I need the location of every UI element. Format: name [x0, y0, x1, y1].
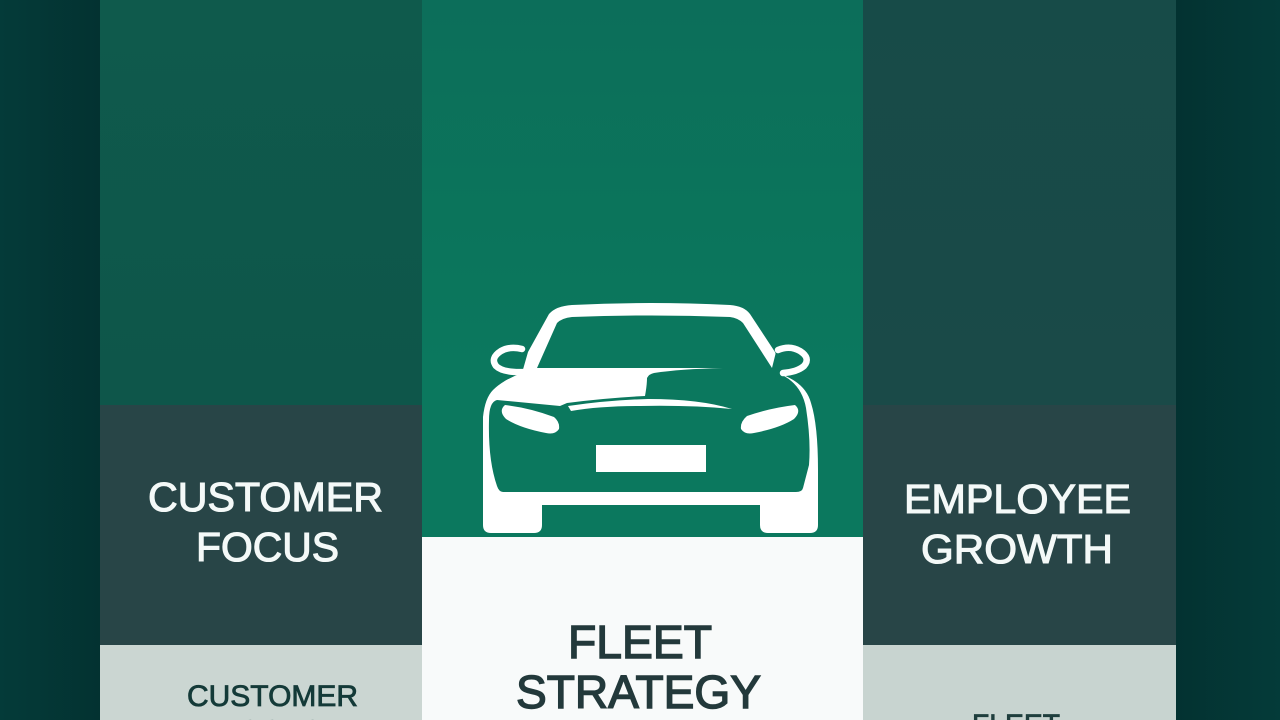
right column upper field — [863, 0, 1176, 405]
left headlight — [502, 405, 559, 434]
panel: fleet strategy column — [422, 0, 863, 720]
panel: customer focus column — [100, 0, 422, 720]
panel: employee growth column — [863, 0, 1176, 720]
heading: employee growth — [904, 476, 1131, 572]
left column dark band — [100, 405, 422, 645]
heading: fleet strategy: STRATEGY — [516, 666, 761, 718]
heading: fleet strategy — [516, 616, 761, 718]
center column white panel — [422, 537, 863, 720]
heading: fleet strategy: FLEET — [568, 616, 712, 668]
heading: employee growth: GROWTH — [921, 526, 1113, 572]
heading: customer focus: FOCUS — [196, 524, 339, 570]
right column dark band — [863, 405, 1176, 645]
left mirror — [494, 348, 525, 372]
heading: employee growth: EMPLOYEE — [904, 476, 1131, 522]
right column light panel — [863, 645, 1176, 720]
left column light panel — [100, 645, 422, 720]
hood crease — [568, 399, 732, 411]
label: customer focus small: CUSTOMER — [187, 680, 358, 713]
license plate — [596, 445, 706, 472]
left column upper field — [100, 0, 422, 405]
heading: customer focus: CUSTOMER — [148, 474, 383, 520]
right mirror — [778, 348, 807, 373]
windshield and hood cutout — [489, 316, 810, 492]
background: left margin — [0, 0, 100, 720]
center column green field — [422, 0, 863, 537]
heading: customer focus — [148, 474, 383, 570]
background: right margin — [1176, 0, 1280, 720]
car silhouette — [483, 303, 818, 533]
icon: car front view — [483, 303, 818, 533]
right headlight — [741, 405, 798, 434]
